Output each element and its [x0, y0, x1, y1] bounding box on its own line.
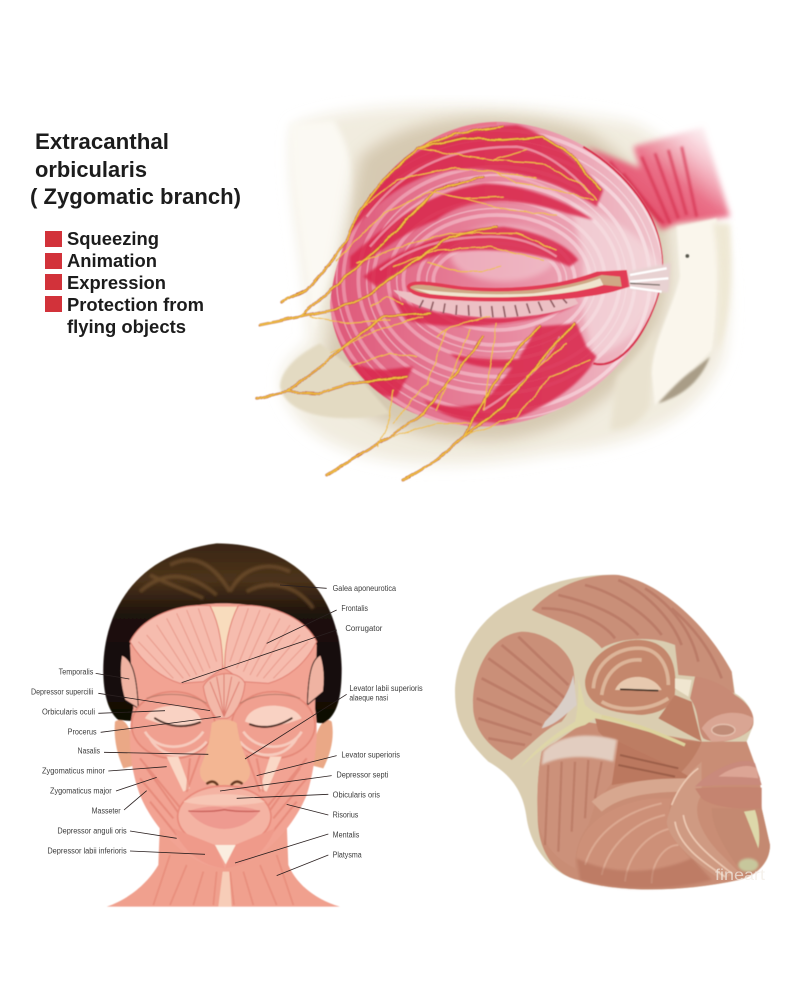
upper lip highlight	[718, 766, 758, 778]
lacrimal spot	[685, 254, 689, 258]
nerve under-stroke	[257, 127, 600, 480]
nasal shadow	[658, 357, 710, 403]
labels left: Temporalis	[59, 667, 93, 676]
shadow around muscle	[323, 117, 670, 440]
zygomatic fibres	[140, 755, 307, 835]
hair	[103, 543, 342, 723]
eyelids and orbital detail	[145, 706, 302, 726]
chin	[173, 828, 275, 868]
eyebrow lines	[147, 694, 300, 703]
lower left cheek	[280, 343, 390, 418]
eye lines	[155, 718, 292, 727]
cheek shade	[577, 858, 712, 889]
eyelid	[615, 677, 662, 690]
masseter fibres	[545, 760, 602, 852]
cheek muscles	[167, 757, 282, 792]
masseter upper pale	[542, 736, 617, 765]
labels left: Orbicularis oculi	[42, 707, 95, 716]
frontalis right	[225, 605, 317, 683]
heading: Extracanthal orbicularis: orbicularis	[35, 157, 147, 182]
bullet list: functions	[45, 229, 204, 337]
nose tip	[702, 713, 753, 742]
zygomatic arch	[520, 678, 685, 768]
temporalis	[473, 632, 575, 760]
risorius sweep	[667, 762, 738, 880]
labels right: Depressor septi	[336, 771, 389, 780]
labels right: Corrugator	[345, 624, 383, 633]
lips	[188, 807, 260, 829]
orbital rings	[145, 732, 302, 755]
leader lines	[96, 585, 347, 876]
orbicularis oculi	[585, 640, 676, 715]
zygomaticus bands	[592, 778, 692, 812]
buccinator fibres	[618, 755, 678, 777]
nostril	[712, 724, 735, 736]
forehead centre	[210, 607, 238, 668]
cheek fibres	[585, 803, 678, 883]
procerus fibres	[610, 147, 697, 223]
bullet list: functions: Squeezing	[67, 229, 159, 249]
labels right	[333, 584, 423, 859]
neck	[107, 822, 340, 907]
muscle rim	[583, 147, 663, 364]
orbicularis left	[132, 692, 215, 758]
bullet list: functions: flying objects	[67, 317, 186, 337]
orbital rings	[593, 648, 668, 709]
head silhouette	[455, 575, 770, 889]
labels left: Depressor anguli oris	[57, 827, 127, 836]
chin node	[738, 858, 758, 872]
levator tendon line	[602, 717, 685, 745]
orbicularis right	[232, 692, 315, 758]
ears	[115, 720, 333, 768]
orbicularis oris	[178, 786, 271, 847]
orbital rim, lower right	[610, 323, 657, 430]
nerve branches	[257, 127, 600, 480]
labels left: Depressor labii inferioris	[47, 847, 127, 856]
buccinator region	[612, 742, 692, 785]
labels left: Zygomaticus minor	[42, 767, 105, 776]
temporal tendon	[542, 675, 577, 728]
platysma fibres	[153, 855, 293, 905]
red muscle wedges	[350, 125, 603, 423]
medial canthal tendon	[628, 263, 671, 293]
diagram: labelled facial muscles, front view	[31, 543, 423, 907]
temporalis strips	[120, 655, 324, 708]
lower face muscle base	[537, 722, 770, 889]
pale area above lid	[450, 225, 557, 282]
masseter	[537, 736, 618, 868]
heading: Extracanthal orbicularis: Extracanthal	[35, 129, 169, 154]
labels right: alaeque nasi	[349, 693, 388, 702]
upper lip band	[183, 794, 265, 805]
frontalis	[532, 575, 734, 693]
labels right: Mentalis	[333, 830, 359, 839]
labels left: Zygomaticus major	[50, 787, 112, 796]
platysma / cheek	[577, 798, 712, 889]
mentalis gap	[215, 845, 236, 864]
watermark: fineart	[715, 867, 766, 884]
pale streaks across red	[367, 147, 590, 410]
nostrils	[207, 782, 242, 785]
left bone highlight	[290, 120, 353, 337]
nerve yellow	[257, 127, 600, 480]
illustration: facial muscles, side view	[455, 575, 770, 889]
heading: Extracanthal orbicularis: ( Zygomatic branch)	[30, 184, 241, 209]
lower lip	[695, 787, 762, 809]
illustration: orbicularis muscle with nerve branches	[257, 106, 731, 480]
eye line	[620, 689, 658, 691]
frontalis fibres	[542, 580, 722, 678]
nasal bone shading	[713, 223, 731, 353]
labels right: Obicularis oris	[333, 791, 380, 800]
labels left: Procerus	[68, 727, 97, 736]
heading: Extracanthal orbicularis	[30, 129, 241, 209]
glabella fan	[203, 674, 245, 718]
labels left: Masseter	[92, 806, 121, 815]
frontalis fibres	[138, 608, 308, 678]
mouth line	[188, 810, 260, 811]
labels left	[31, 667, 127, 856]
temporalis fibres	[477, 637, 568, 745]
labels right: Platysma	[333, 850, 362, 859]
levator muscles	[595, 718, 702, 775]
chin tendon	[744, 810, 759, 848]
procerus muscle fan	[587, 127, 730, 230]
bone and skin backdrop	[282, 106, 728, 464]
orbicularis muscle	[330, 121, 664, 427]
labels right: Levator labii superioris	[349, 684, 423, 693]
closed eyelid	[393, 270, 630, 317]
labels right: Risorius	[333, 811, 358, 820]
labels left: Depressor supercilii	[31, 687, 94, 696]
face	[130, 603, 317, 868]
bullet list: functions: Protection from	[67, 295, 204, 315]
chin depressors	[712, 808, 770, 877]
frontalis left	[130, 605, 223, 683]
nose	[200, 720, 250, 785]
neck centre	[218, 872, 232, 907]
pale area, right side	[570, 203, 660, 357]
nasalis	[690, 677, 754, 742]
nasal bone	[652, 218, 718, 405]
muscles below eye	[658, 695, 702, 742]
bullet list: functions: Expression	[67, 273, 166, 293]
labels right: Galea aponeurotica	[333, 584, 396, 593]
hair highlights	[140, 560, 313, 608]
medial canthus tendon	[675, 678, 692, 697]
labels right: Frontalis	[341, 604, 368, 613]
labels right: Levator superioris	[341, 751, 400, 760]
labels left: Nasalis	[78, 747, 100, 756]
upper lip	[695, 761, 762, 787]
bullet list: functions: Animation	[67, 251, 157, 271]
sweep fibres	[672, 768, 732, 877]
